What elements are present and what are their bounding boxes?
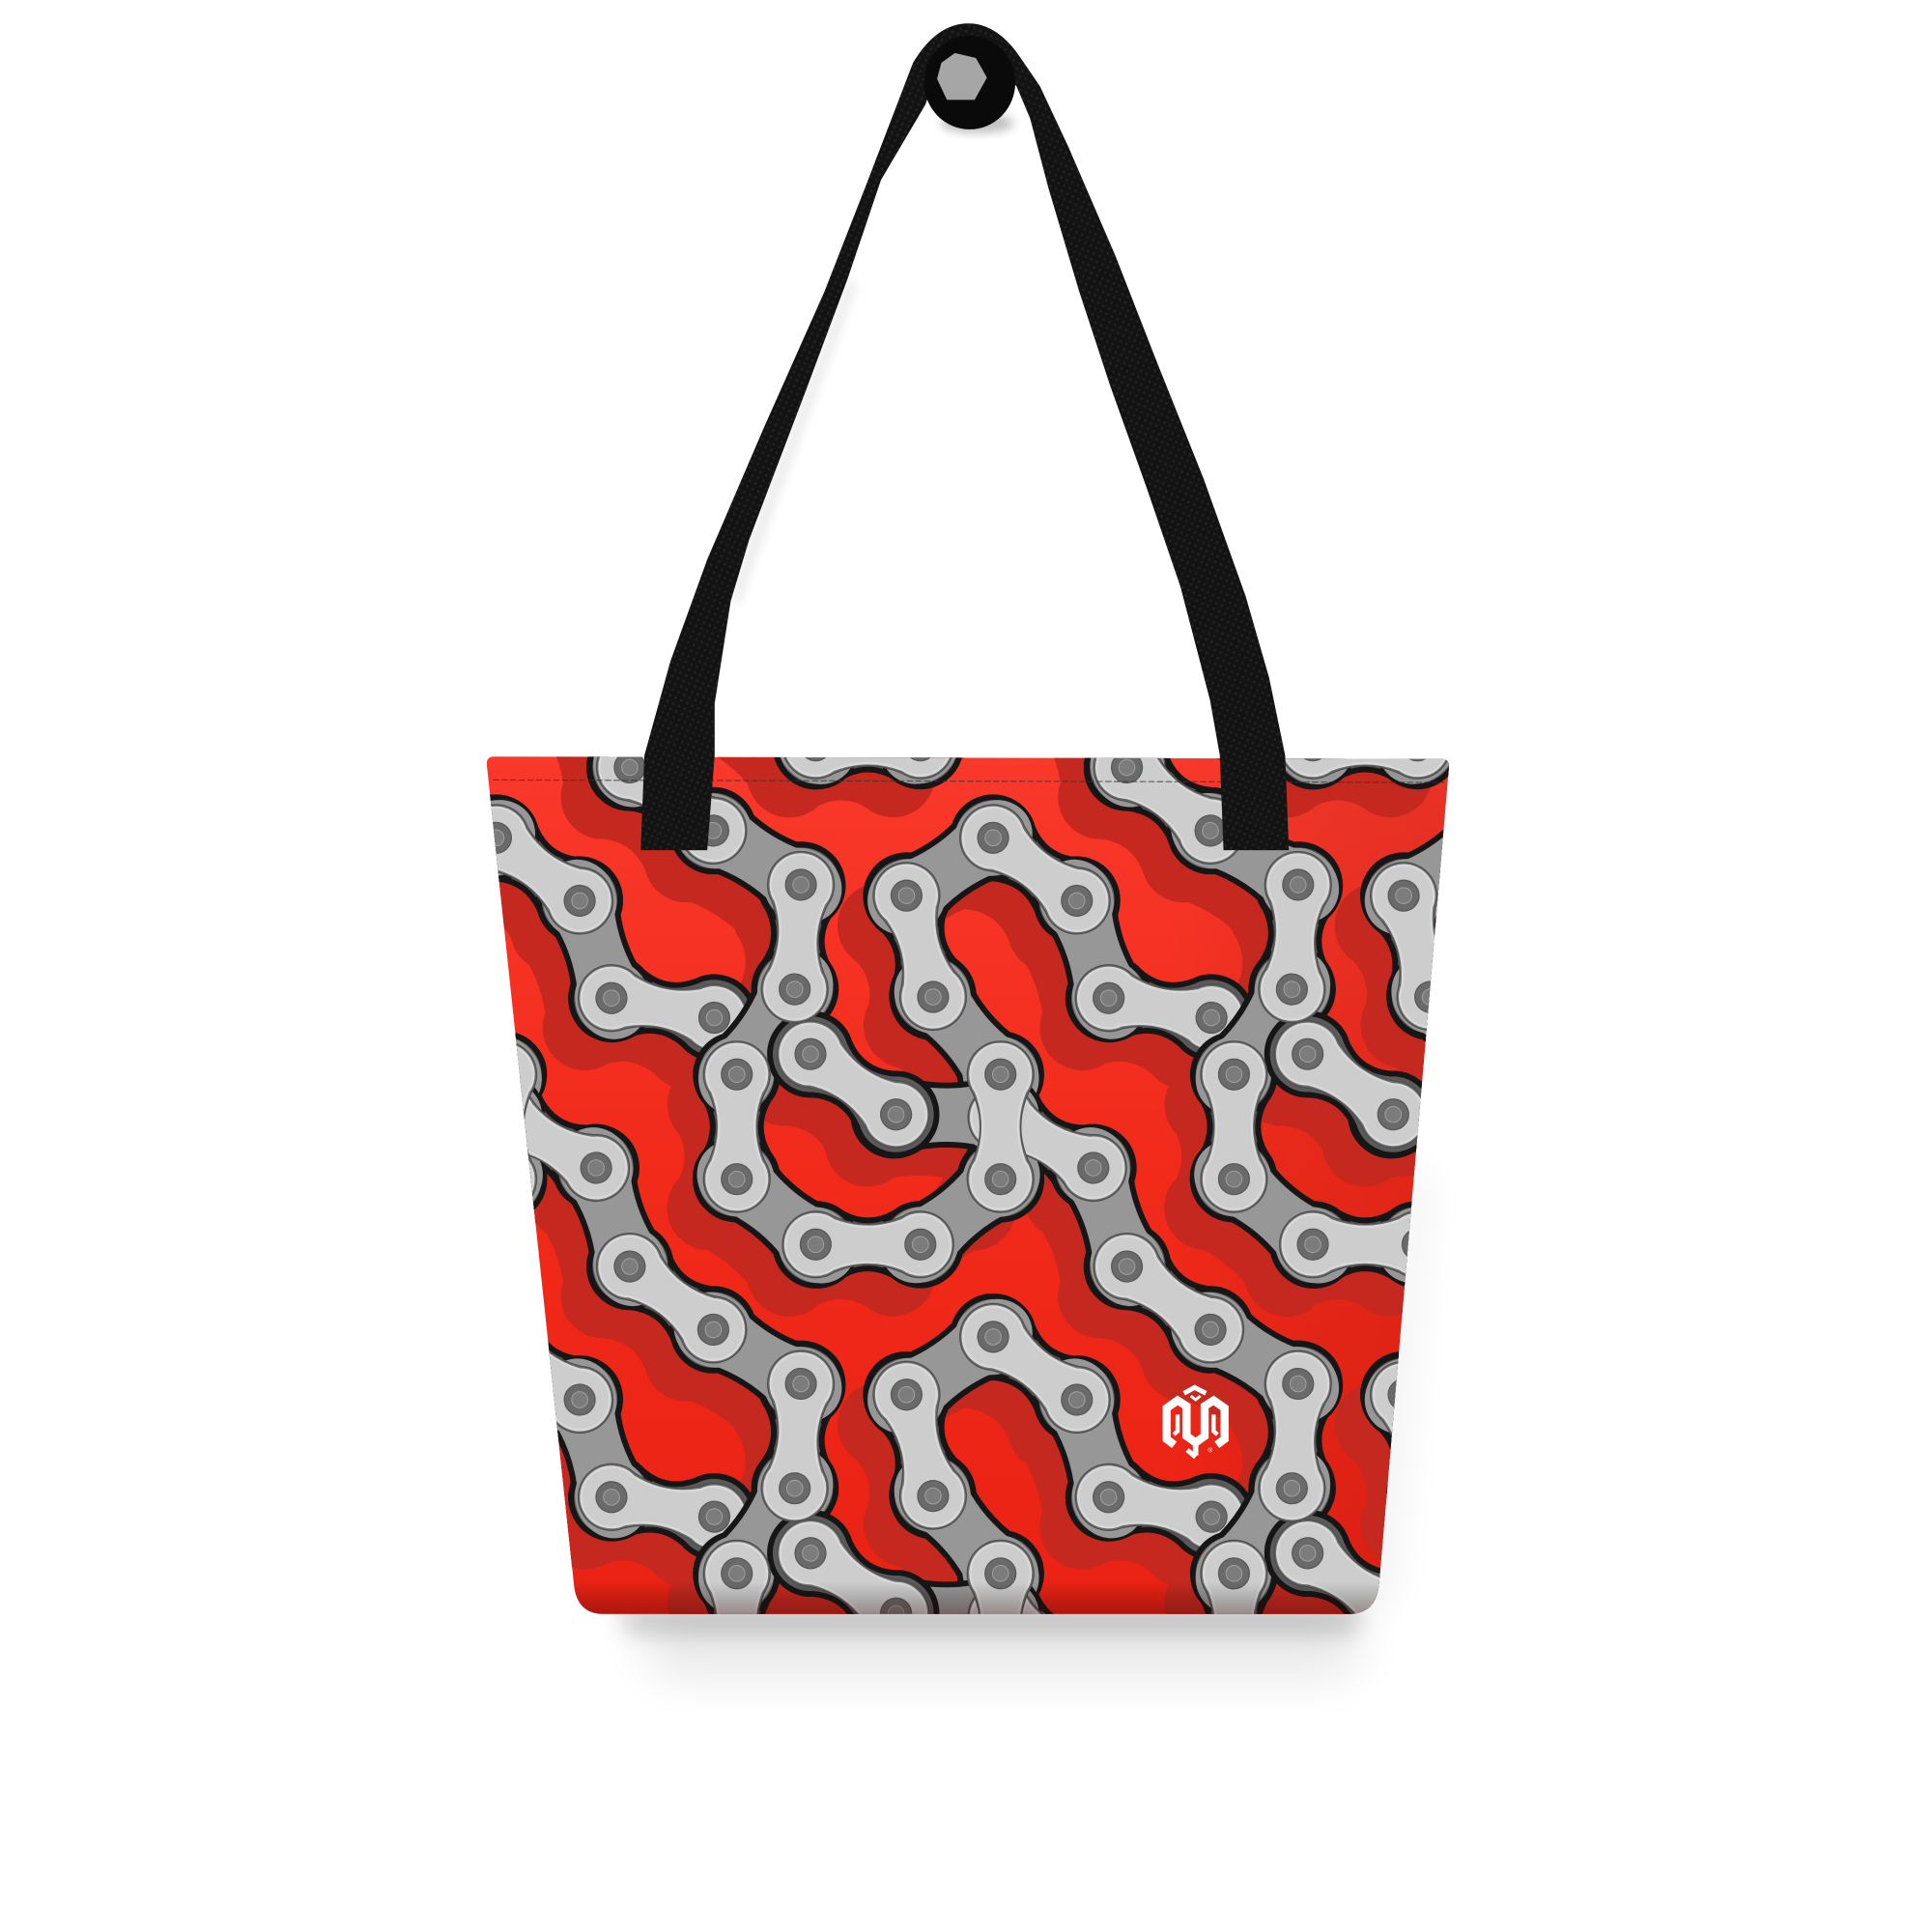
bag edge shading and hem stitching — [469, 780, 1466, 1616]
bag ground shadow — [616, 1171, 1430, 1676]
chain shadow pattern — [490, 23, 1449, 1614]
bag body — [487, 756, 1449, 1614]
tote bag product image — [487, 23, 1449, 1684]
chain lower light links — [493, 23, 1445, 1614]
chain inner dark links — [490, 23, 1449, 1614]
chain upper light links — [491, 23, 1447, 1614]
wall peg — [924, 36, 1015, 133]
tote handles — [640, 23, 1289, 850]
logo mark — [1167, 1387, 1225, 1457]
chain crossing dark links — [183, 434, 1450, 1670]
logo mark: ® — [1208, 1447, 1212, 1455]
chain back plates — [490, 23, 1449, 1614]
